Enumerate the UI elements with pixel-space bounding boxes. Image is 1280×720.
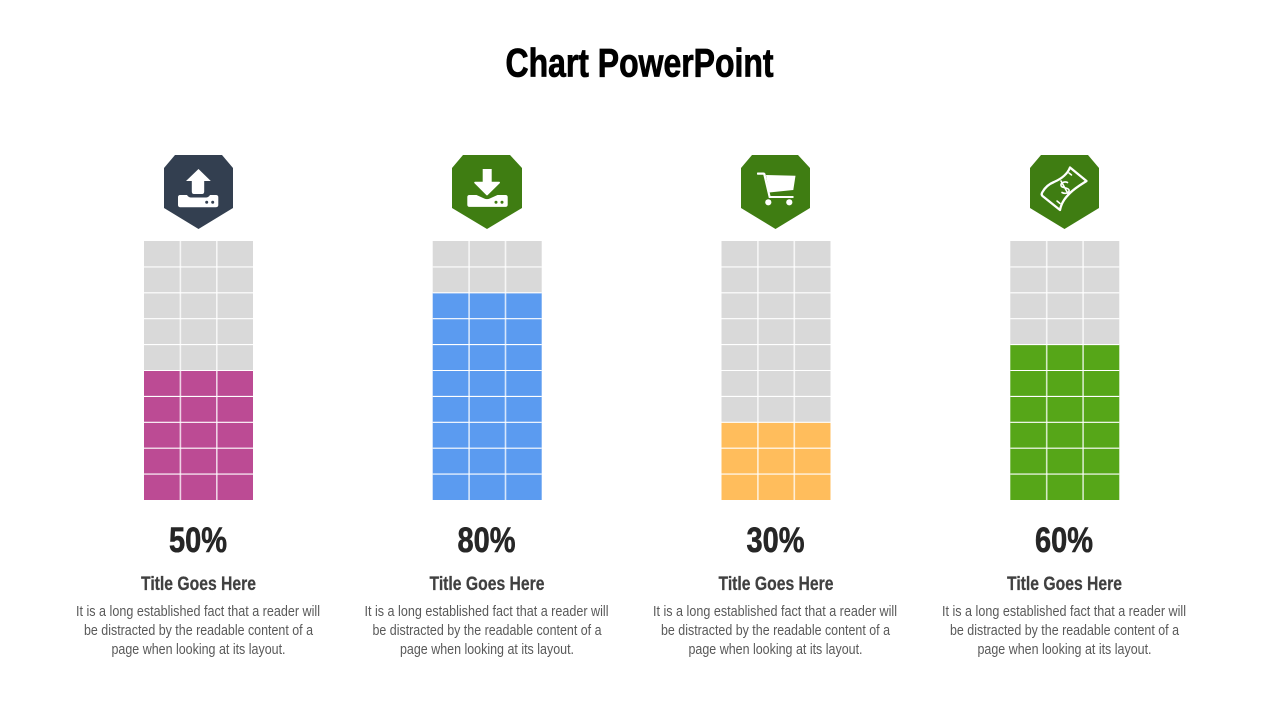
text block	[76, 604, 320, 658]
value: 50%: 50%	[169, 521, 227, 560]
text block	[653, 604, 897, 658]
value: 30%: 30%	[746, 521, 804, 560]
text block: be distracted by the readable content of a	[661, 623, 891, 639]
text block	[364, 604, 608, 658]
text block: It is a long established fact that a reader will	[364, 604, 608, 620]
heading: Title Goes Here	[718, 574, 834, 595]
panel: 80% column	[364, 155, 608, 658]
bar chart: 50% filled	[144, 241, 253, 500]
text block: page when looking at its layout.	[112, 642, 286, 658]
text block: page when looking at its layout.	[688, 642, 862, 658]
heading: Title Goes Here	[141, 574, 256, 595]
heading: Title Goes Here	[1007, 574, 1122, 595]
icon: upload	[164, 155, 233, 229]
text block	[942, 604, 1186, 658]
bar chart: 30% filled	[722, 241, 830, 500]
bar chart: 60% filled	[1010, 241, 1119, 500]
value: 60%: 60%	[1035, 521, 1093, 560]
panel: 50% column	[76, 155, 320, 658]
text block: It is a long established fact that a reader will	[76, 604, 320, 620]
icon: banknote	[1030, 155, 1099, 229]
icon: download	[452, 155, 522, 229]
text block: It is a long established fact that a reader will	[653, 604, 897, 620]
text block: page when looking at its layout.	[978, 642, 1152, 658]
text block: It is a long established fact that a reader will	[942, 604, 1186, 620]
heading: Title Goes Here	[430, 574, 544, 595]
text block: page when looking at its layout.	[400, 642, 574, 658]
bar chart: 80% filled	[433, 241, 542, 500]
value: 80%: 80%	[458, 521, 516, 560]
text block: be distracted by the readable content of a	[950, 623, 1180, 639]
panel: 30% column	[653, 155, 897, 658]
title: Chart PowerPoint	[506, 42, 774, 86]
panel: 60% column	[942, 155, 1186, 658]
text block: be distracted by the readable content of a	[372, 623, 602, 639]
icon: shopping cart	[741, 155, 810, 229]
text block: be distracted by the readable content of a	[84, 623, 314, 639]
